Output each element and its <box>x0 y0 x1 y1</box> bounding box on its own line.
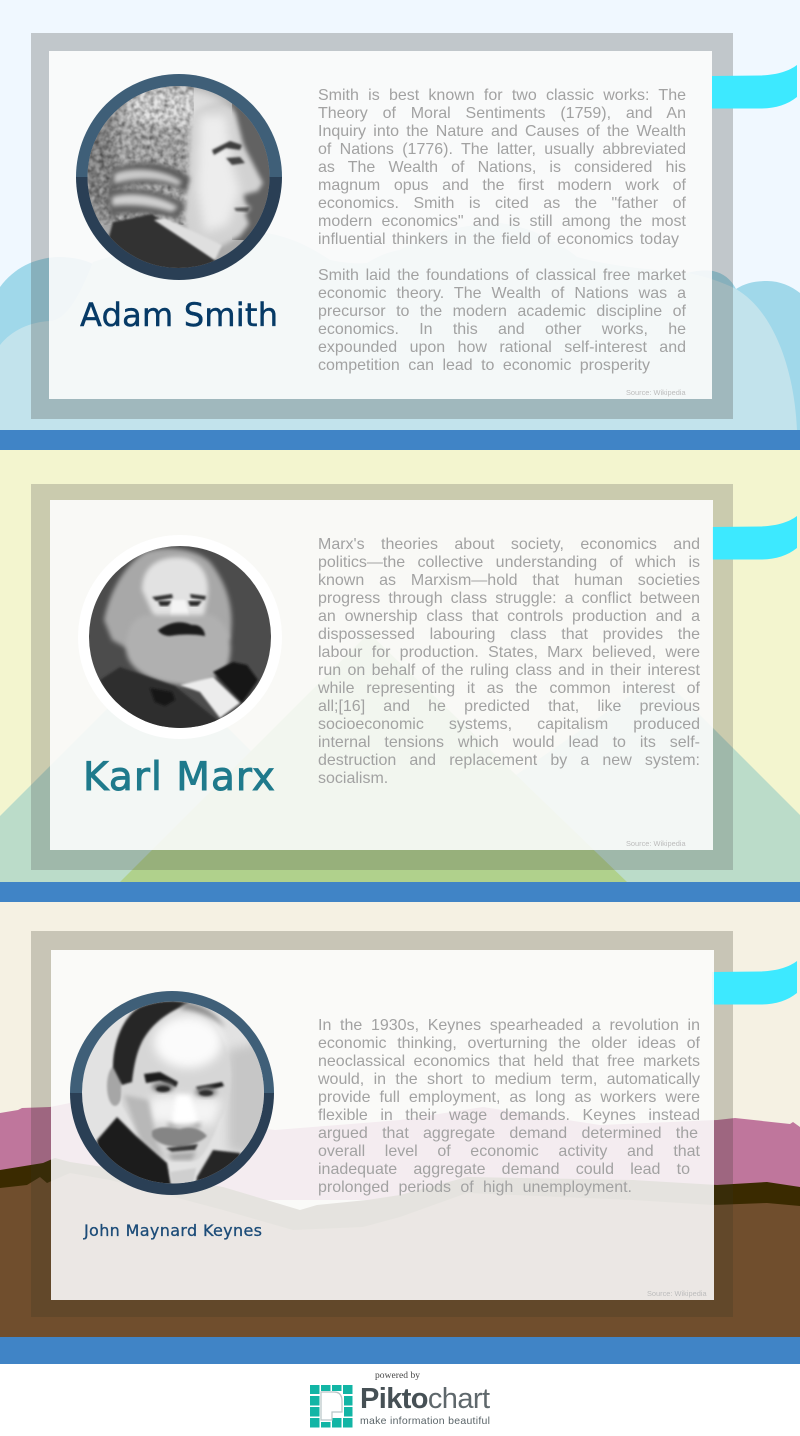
biography paragraph one: Smith is best known for two classic works: The <box>318 87 686 104</box>
biography paragraph: overall level of economic activity and that <box>318 1143 700 1160</box>
biography paragraph two: competition can lead to economic prosperity <box>318 357 650 374</box>
source note: Source: Wikipedia <box>647 1289 707 1298</box>
biography paragraph: labour for production. States, Marx believed, were <box>318 644 700 661</box>
background clouds <box>0 223 800 430</box>
portrait: Adam Smith <box>76 74 282 280</box>
biography paragraph <box>318 536 700 787</box>
biography paragraph: destruction and replacement by a new system: <box>318 752 700 769</box>
biography paragraph: would, in the short to medium term, automatically <box>318 1071 700 1088</box>
blue band <box>0 882 800 902</box>
biography paragraph: socioeconomic systems, capitalism produced <box>318 716 700 733</box>
text panel <box>49 51 712 399</box>
heading: Karl Marx: Karl Marx <box>83 755 275 800</box>
portrait: Karl Marx <box>78 535 282 739</box>
biography paragraph: progress through class struggle: a conflict between <box>318 590 700 607</box>
biography paragraph: dispossessed labouring class that provides the <box>318 626 700 643</box>
biography paragraph one: as The Wealth of Nations, is considered his <box>318 159 686 176</box>
text panel <box>50 500 713 850</box>
flag ribbon <box>712 65 797 108</box>
section: Adam Smith <box>0 0 800 450</box>
text panel <box>51 950 714 1300</box>
biography paragraph one: economics. Smith is cited as the "father of <box>318 195 686 212</box>
Piktochart wordmark: Piktochart <box>360 1383 490 1415</box>
heading: John Maynard Keynes: John Maynard Keynes <box>83 1221 262 1240</box>
biography paragraph one: Theory of Moral Sentiments (1759), and An <box>318 105 686 122</box>
biography paragraph two <box>318 267 686 374</box>
biography paragraph: argued that aggregate demand determined the <box>318 1125 698 1142</box>
biography paragraph two: economics. In this and other works, he <box>318 321 686 338</box>
biography paragraph: inadequate aggregate demand could lead to <box>318 1161 690 1178</box>
biography paragraph one <box>318 87 686 248</box>
biography paragraph: flexible in their wage demands. Keynes instead <box>318 1107 700 1124</box>
biography paragraph two: economic theory. The Wealth of Nations was a <box>318 285 686 302</box>
biography paragraph one: magnum opus and the first modern work of <box>318 177 686 194</box>
biography paragraph one: of Nations (1776). The latter, usually abbreviated <box>318 141 686 158</box>
section: John Maynard Keynes <box>0 902 800 1364</box>
footer: powered by Piktochart <box>0 1364 800 1436</box>
portrait: John Maynard Keynes <box>70 991 274 1195</box>
biography paragraph: politics—the collective understanding of which is <box>318 554 700 571</box>
background hills <box>0 1103 800 1337</box>
section: Karl Marx <box>0 450 800 902</box>
flag ribbon <box>712 516 797 560</box>
biography paragraph two: precursor to the modern academic discipline of <box>318 303 686 320</box>
frame <box>31 931 733 1317</box>
flag ribbon <box>712 961 797 1004</box>
icon: Piktochart logo <box>310 1385 352 1428</box>
biography paragraph: run on behalf of the ruling class and in their interest <box>318 662 700 679</box>
biography paragraph: neoclassical economics that held that free markets <box>318 1053 700 1070</box>
heading: Adam Smith: Adam Smith <box>80 296 278 334</box>
biography paragraph: economic thinking, overturning the older ideas of <box>318 1035 700 1052</box>
biography paragraph: prolonged periods of high unemployment. <box>318 1179 632 1196</box>
biography paragraph: all;[16] and he predicted that, like previous <box>318 698 700 715</box>
frame <box>31 484 733 870</box>
biography paragraph: known as Marxism—hold that human societies <box>318 572 700 589</box>
source note: Source: Wikipedia <box>626 839 686 848</box>
source note: Source: Wikipedia <box>626 388 686 397</box>
biography paragraph: internal tensions which would lead to its self- <box>318 734 700 751</box>
biography paragraph one: influential thinkers in the field of economics today <box>318 231 679 248</box>
biography paragraph: Marx's theories about society, economics and <box>318 536 700 553</box>
biography paragraph: an ownership class that controls production and a <box>318 608 700 625</box>
tagline: make information beautiful <box>360 1415 490 1427</box>
biography paragraph <box>318 1017 700 1196</box>
biography paragraph: while representing it as the common interest of <box>318 680 700 697</box>
biography paragraph one: Inquiry into the Nature and Causes of the Wealth <box>318 123 686 140</box>
biography paragraph: provide full employment, as long as workers were <box>318 1089 700 1106</box>
biography paragraph two: expounded upon how rational self-interest and <box>318 339 686 356</box>
frame <box>31 33 733 419</box>
biography paragraph: socialism. <box>318 770 388 787</box>
background mountains <box>0 633 800 900</box>
biography paragraph one: modern economics" and is still among the most <box>318 213 686 230</box>
blue band <box>0 430 800 450</box>
biography paragraph two: Smith laid the foundations of classical free market <box>318 267 686 284</box>
blue band <box>0 1337 800 1364</box>
biography paragraph: In the 1930s, Keynes spearheaded a revolution in <box>318 1017 700 1034</box>
powered by label: powered by <box>375 1371 420 1381</box>
